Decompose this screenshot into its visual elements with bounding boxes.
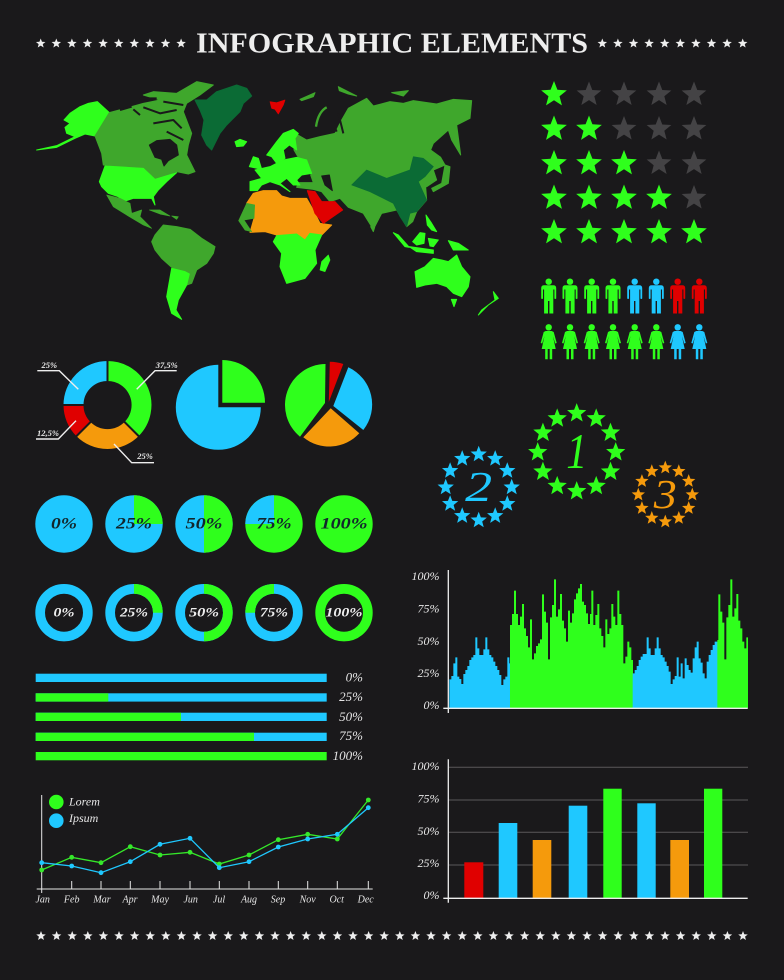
green area 2	[717, 579, 748, 708]
percentage rings	[40, 589, 368, 637]
month labels: Apr	[122, 895, 138, 906]
ring 75%: 75%	[260, 605, 288, 620]
Arabia	[307, 191, 343, 223]
month labels: Jul	[213, 895, 225, 906]
people icons: men	[541, 278, 707, 314]
Greenland	[195, 85, 252, 150]
month labels	[35, 895, 374, 906]
pie 75%: 75%	[256, 516, 292, 533]
star ratings	[541, 81, 707, 243]
series Lorem	[39, 798, 371, 872]
Indonesia and Philippines	[393, 215, 468, 253]
month labels: Feb	[63, 895, 79, 906]
area chart labels: 50%	[418, 634, 440, 648]
South America south	[167, 268, 189, 319]
bars	[464, 789, 722, 898]
bar chart labels: 100%	[412, 759, 440, 773]
area chart axes	[443, 570, 748, 713]
medal 1: 1	[566, 423, 587, 479]
area chart labels	[412, 569, 440, 712]
world map	[37, 82, 498, 319]
progress bars: 100%	[333, 748, 363, 763]
month labels: Sep	[271, 895, 285, 906]
USA	[99, 166, 177, 205]
medal 3	[632, 461, 699, 527]
progress bars	[36, 670, 363, 763]
ring 25%	[110, 589, 158, 637]
China	[352, 157, 433, 227]
month labels: Aug	[240, 895, 257, 906]
pie 0%	[35, 495, 93, 553]
pie 25%	[105, 495, 163, 553]
progress bars: 25%	[339, 689, 363, 704]
ring 100%: 100%	[326, 605, 363, 620]
bar chart labels: 75%	[418, 792, 440, 806]
ring 100%	[320, 589, 368, 637]
area chart labels: 100%	[412, 569, 440, 583]
North Africa	[247, 191, 332, 240]
donut chart with callouts: 12,5%	[37, 428, 59, 438]
rating stars filled	[541, 81, 707, 243]
pie chart: exploded	[285, 362, 372, 446]
Alaska	[37, 102, 109, 150]
pie 25%: 25%	[115, 516, 152, 533]
progress bars: 50%	[339, 709, 363, 724]
Europe	[249, 129, 312, 192]
legend: Ipsum	[68, 811, 99, 825]
Madagascar	[320, 255, 330, 272]
people icons: women	[541, 324, 707, 359]
series Ipsum	[39, 805, 371, 875]
month labels: Mar	[92, 895, 111, 906]
ring 50%	[180, 589, 228, 637]
pie 75%	[245, 495, 303, 553]
Australia	[415, 255, 498, 315]
area chart labels: 75%	[418, 602, 440, 616]
medal 2: 2	[465, 465, 492, 511]
Svalbard	[270, 100, 285, 114]
month labels: Dec	[357, 895, 374, 906]
bar chart labels: 25%	[418, 856, 440, 870]
blue area 2	[633, 637, 718, 708]
ring 50%: 50%	[189, 605, 219, 620]
donut chart with callouts: 25%	[136, 451, 153, 461]
South America north	[152, 225, 215, 285]
bar chart labels: 50%	[418, 824, 440, 838]
line chart axes	[37, 795, 373, 893]
bar chart labels	[412, 759, 440, 902]
pie 50%: 50%	[186, 516, 222, 533]
pie 100%	[315, 495, 373, 553]
bar chart axes	[443, 759, 748, 903]
medal 3: 3	[653, 471, 677, 517]
West Sahara	[239, 203, 255, 232]
medal 1	[528, 403, 625, 500]
month labels: Oct	[329, 895, 344, 906]
blue area 1	[449, 637, 510, 708]
month labels: Nov	[299, 895, 316, 906]
percentage pies	[35, 495, 373, 553]
legend	[49, 794, 100, 828]
rating stars empty	[577, 82, 706, 209]
progress bars: 0%	[346, 670, 363, 685]
ring 0%: 0%	[54, 605, 75, 620]
pie 0%: 0%	[51, 516, 77, 533]
area chart labels: 0%	[424, 698, 440, 712]
title: INFOGRAPHIC ELEMENTS	[196, 28, 588, 60]
month labels: Jun	[183, 895, 198, 906]
donut chart with callouts: 25%	[41, 360, 57, 370]
Canada	[95, 82, 213, 179]
pie chart: quarter	[176, 360, 265, 450]
Sub-Saharan Africa	[273, 233, 322, 283]
line chart	[35, 794, 374, 906]
progress bars: 75%	[339, 728, 363, 743]
bar chart labels: 0%	[424, 888, 440, 902]
ring 0%	[40, 589, 88, 637]
donut chart with callouts: 37,5%	[155, 360, 178, 370]
header stars right	[598, 38, 747, 48]
medal 2	[438, 446, 520, 527]
green area 1	[510, 579, 633, 708]
month labels: May	[150, 895, 169, 906]
donut chart with callouts	[36, 360, 178, 463]
bar chart	[412, 759, 748, 903]
pie 50%	[175, 495, 233, 553]
area chart labels: 25%	[418, 666, 440, 680]
ring 25%: 25%	[119, 605, 148, 620]
legend: Lorem	[68, 794, 100, 808]
Russia and Asia	[294, 87, 472, 232]
Central America	[107, 195, 178, 228]
pie 100%: 100%	[320, 516, 368, 533]
Iceland	[235, 139, 247, 147]
footer stars	[36, 931, 748, 940]
ring 75%	[250, 589, 298, 637]
header stars left	[36, 38, 186, 48]
area step chart	[412, 569, 748, 713]
month labels: Jan	[35, 895, 50, 906]
